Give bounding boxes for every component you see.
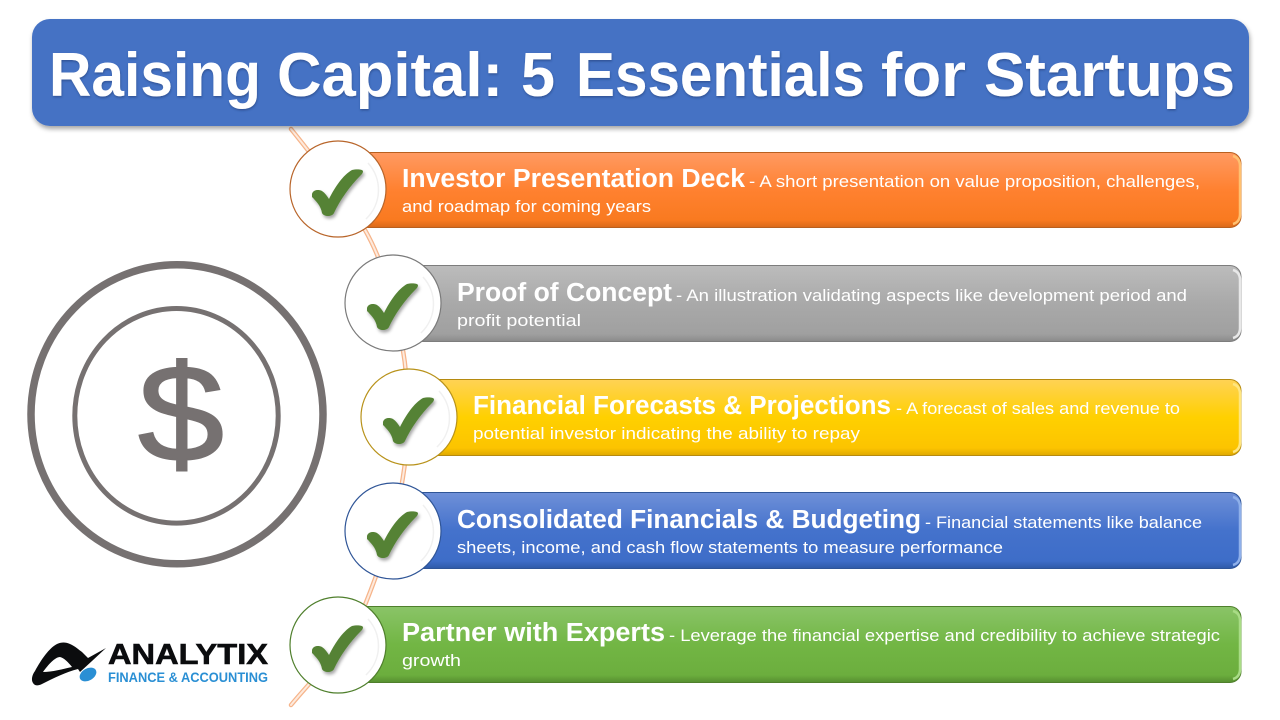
heading and description: Financial Forecasts & Projections [473, 392, 891, 420]
icon: check badge 4 [345, 483, 441, 579]
icon: check badge 2 [345, 255, 441, 351]
heading and description: Consolidated Financials & Budgeting [457, 506, 921, 534]
panel: financial forecasts and projections [415, 380, 1241, 456]
panel: consolidated financials and budgeting [400, 492, 1241, 568]
icon: check badge 1 [290, 141, 386, 237]
icon: check badge 5 [290, 597, 386, 693]
heading and description: - Financial statements like balance [925, 513, 1202, 532]
heading and description: potential investor indicating the ability to repay [473, 424, 861, 443]
heading and description [457, 279, 1187, 330]
panel: proof of concept [400, 266, 1241, 342]
panel: partner with experts [345, 606, 1241, 682]
heading and description: and roadmap for coming years [402, 197, 651, 216]
title text: Raising [49, 40, 261, 110]
heading and description: - A forecast of sales and revenue to [896, 399, 1180, 418]
heading and description: Proof of Concept [457, 279, 673, 307]
heading and description: sheets, income, and cash flow statements to measure performance [457, 538, 1003, 557]
heading and description: - Leverage the financial expertise and credibility to achieve strategic [669, 626, 1221, 645]
icon: dollar coin [31, 265, 323, 564]
heading and description [457, 506, 1202, 557]
heading and description [473, 392, 1180, 443]
logo: analytix: FINANCE & ACCOUNTING [108, 670, 268, 685]
heading and description: profit potential [457, 311, 581, 330]
panel: investor presentation deck [345, 152, 1241, 228]
icon: check badge 3 [361, 369, 457, 465]
heading and description: Partner with Experts [402, 619, 665, 647]
title text: 5 [521, 40, 555, 110]
title text: Startups [984, 40, 1235, 110]
title banner [32, 19, 1249, 126]
logo: analytix [32, 639, 269, 685]
icon: dollar coin: $ [138, 337, 224, 491]
title text: Essentials [576, 40, 865, 110]
title text: Capital: [277, 40, 503, 110]
title text: for [881, 40, 966, 110]
connector arc [291, 129, 408, 705]
heading and description [402, 619, 1221, 670]
heading and description: - An illustration validating aspects like development period and [676, 286, 1187, 305]
title text [49, 40, 1235, 110]
heading and description: - A short presentation on value proposition, challenges, [749, 172, 1200, 191]
heading and description: growth [402, 651, 461, 670]
logo: analytix: ANALYTIX [108, 639, 269, 671]
heading and description: Investor Presentation Deck [402, 165, 746, 193]
heading and description [402, 165, 1200, 216]
